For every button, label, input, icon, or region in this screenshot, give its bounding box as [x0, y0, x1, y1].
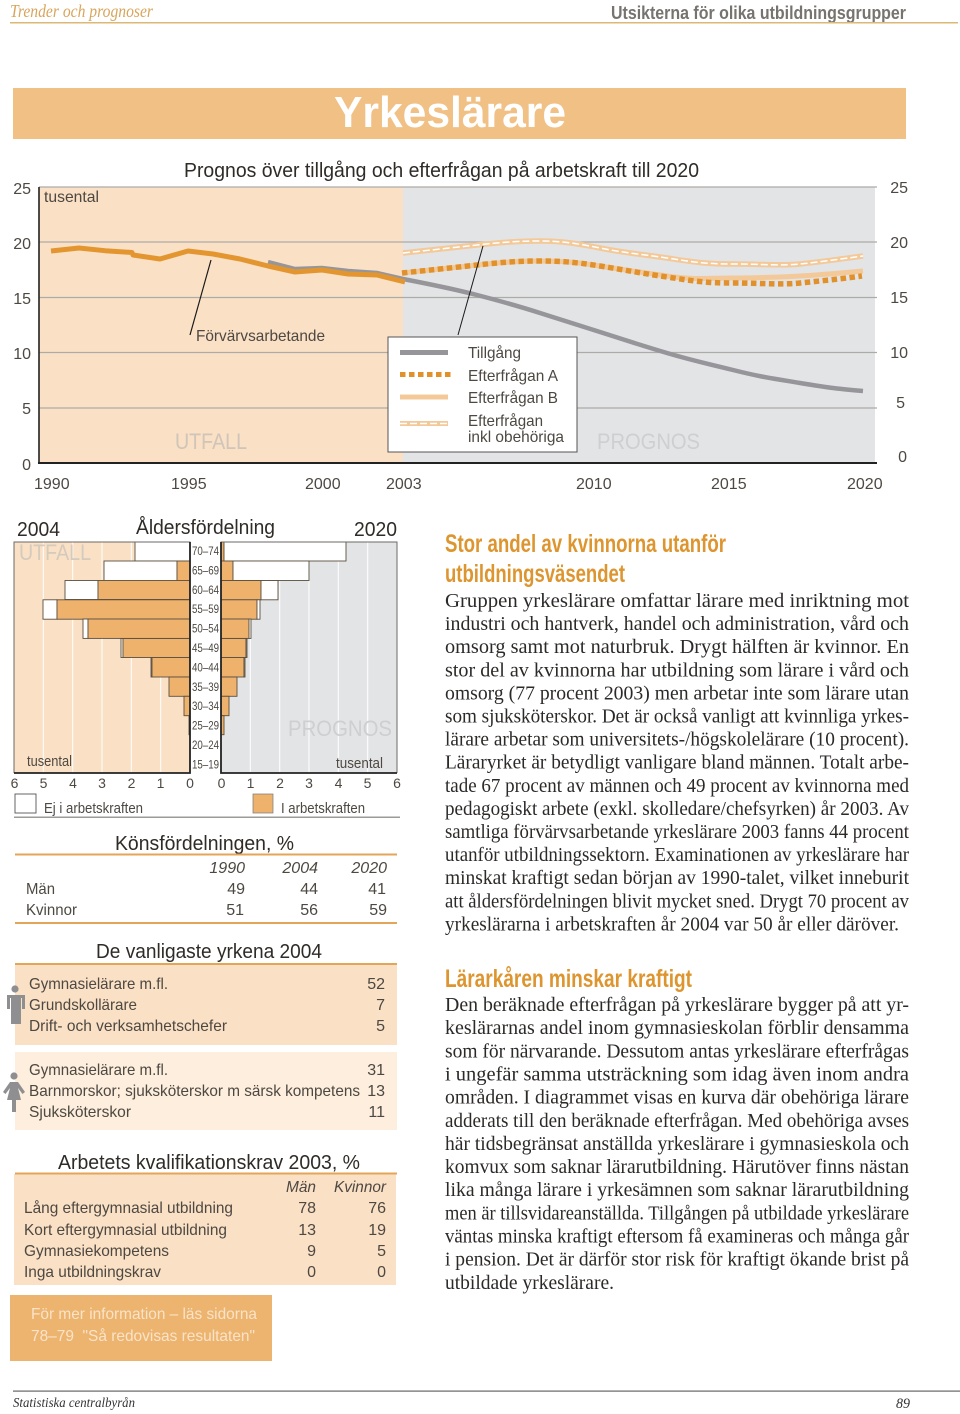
article body 1: Läraryrket är betydligt vanligare bland männen. Totalt arbe-	[445, 752, 909, 774]
demand incl. unqualified line	[403, 241, 863, 265]
pyramid legend: I arbetskraften	[281, 801, 365, 817]
section: most common occupations	[3, 940, 397, 1130]
label: forecast: PROGNOS	[597, 429, 700, 454]
x axis labels: 1990	[34, 476, 70, 493]
y axis labels right: 5	[896, 395, 905, 412]
chart background: outcome	[39, 187, 403, 463]
table: qualification requirements: Män	[286, 1179, 316, 1196]
pyramid x axis labels: 2	[128, 775, 136, 791]
y axis labels right: 0	[898, 449, 907, 466]
age group labels: 30–34	[192, 699, 219, 713]
y axis labels left: 15	[13, 291, 31, 308]
article body 1: stor del av kvinnorna har utbildning som lärare i vård och	[445, 659, 909, 681]
pyramid x axis labels: 6	[393, 775, 401, 791]
y axis labels left: 10	[13, 346, 31, 363]
table: gender distribution: 41	[368, 881, 386, 898]
panel: men occupations: Drift- och verksamhetschefer	[29, 1018, 228, 1035]
pyramid panel: 2004: UTFALL	[19, 540, 91, 565]
article body 2: Den beräknade efterfrågan på yrkeslärare bygger på att yr-	[445, 994, 909, 1016]
table: qualification requirements: 5	[377, 1243, 386, 1260]
table: gender distribution: Könsfördelningen, %	[115, 832, 294, 855]
article body 2: men är tillsvidareanställda. Tillgången på utbildade yrkeslärare	[445, 1202, 909, 1224]
age group labels: 35–39	[192, 680, 219, 694]
article body 1: utanför utbildningssektorn. Examinationen av yrkeslärare har	[445, 844, 909, 866]
table: qualification requirements: 76	[368, 1200, 386, 1217]
pyramid x axis labels: 1	[247, 775, 255, 791]
pyramid headings: 2020	[354, 518, 397, 541]
table: gender distribution: Män	[26, 881, 55, 898]
panel: men occupations: 52	[367, 976, 385, 993]
table: qualification requirements: Arbetets kvalifikationskrav 2003, %	[58, 1151, 360, 1174]
panel: women occupations: 13	[367, 1083, 385, 1100]
article body 2: i ungefär samma utsträckning som idag även inom andra	[445, 1064, 909, 1086]
pyramid panel: 2020: tusental	[336, 756, 383, 772]
page footer: Statistiska centralbyrån	[13, 1396, 135, 1411]
table: qualification requirements: Inga utbildningskrav	[24, 1264, 161, 1281]
pyramid panel: 2020	[221, 542, 397, 773]
article body 2: komvux som saknar lärarutbildning. Härutöver finns nästan	[445, 1156, 909, 1178]
age group labels: 70–74	[192, 544, 219, 558]
table: qualification requirements: Kort eftergymnasial utbildning	[24, 1222, 227, 1239]
article section: women outside education	[445, 530, 910, 935]
age group labels: 65–69	[192, 563, 219, 577]
callout: more information: 78–79 "Så redovisas resultaten"	[31, 1327, 255, 1345]
callout: more information	[10, 1295, 272, 1361]
article body 1: att åldersfördelningen blivit mycket sned. Drygt 70 procent av	[445, 890, 910, 912]
page header: Trender och prognoser	[10, 1, 154, 21]
table: qualification requirements: 9	[307, 1243, 316, 1260]
pyramid x axis labels: 3	[98, 775, 106, 791]
article body 2	[445, 994, 909, 1294]
article heading 2: Lärarkåren minskar kraftigt	[445, 965, 693, 993]
pyramid x axis labels: 5	[364, 775, 372, 791]
age group labels: 55–59	[192, 602, 219, 616]
label: thousands: tusental	[44, 189, 99, 206]
table: qualification requirements: 0	[307, 1264, 316, 1281]
table: gender distribution: Kvinnor	[26, 902, 78, 919]
demand B line	[402, 261, 863, 278]
legend: Efterfrågan A	[468, 367, 558, 385]
article body 1: pedagogiskt arbete (exkl. skolledare/chefsyrken) år 2003. Av	[445, 798, 910, 820]
article body 2: områden. I diagrammet visas en kurva där obehöriga lärare	[445, 1087, 909, 1109]
demand A line	[402, 261, 862, 284]
pyramid legend: Ej i arbetskraften	[44, 801, 143, 817]
x axis labels: 2003	[386, 476, 422, 493]
pyramid x axis labels	[11, 775, 401, 791]
page header	[10, 1, 958, 24]
pyramid x axis labels: 0	[218, 775, 226, 791]
table: qualification requirements: Kvinnor	[334, 1179, 387, 1196]
x axis labels: 2000	[305, 476, 341, 493]
table: qualification requirements: 19	[368, 1222, 386, 1239]
x axis labels: 2010	[576, 476, 612, 493]
article body 1: samtliga förvärvsarbetande yrkeslärare 2003 fanns 44 procent	[445, 821, 909, 843]
age group labels: 45–49	[192, 641, 219, 655]
article body 2: väntas minska kraftigt eftersom få examineras och många går	[445, 1226, 909, 1248]
page footer: 89	[896, 1396, 910, 1412]
table: gender distribution: 44	[300, 881, 318, 898]
pyramid panel: 2004	[14, 540, 190, 773]
legend: Tillgång	[468, 344, 521, 362]
x axis labels: 2020	[847, 476, 883, 493]
panel: women occupations: Barnmorskor; sjuksköterskor m särsk kompetens	[29, 1083, 360, 1100]
article body 2: i pension. Det är därför stor risk för kraftigt ökande brist på	[445, 1249, 909, 1271]
table: qualification requirements: 78	[298, 1200, 316, 1217]
pyramid x axis labels: 4	[335, 775, 343, 791]
age group labels: 60–64	[192, 583, 219, 597]
table: gender distribution: 59	[369, 902, 387, 919]
page header: Utsikterna för olika utbildningsgrupper	[611, 3, 906, 23]
title banner: Yrkeslärare	[334, 88, 566, 137]
icon: woman	[3, 1072, 25, 1112]
legend: inkl obehöriga	[468, 429, 564, 446]
article heading 1: utbildningsväsendet	[445, 560, 625, 588]
panel: women occupations: Gymnasielärare m.fl.	[29, 1062, 168, 1079]
employed line	[51, 248, 405, 282]
table: qualification requirements: Lång eftergymnasial utbildning	[24, 1199, 233, 1217]
article body 1: yrkeslärarna i arbetskraften år 2004 var 50 år eller däröver.	[445, 913, 899, 935]
article body 1: tade 67 procent av männen och 49 procent av kvinnorna med	[445, 775, 909, 797]
article body 1: som sjuksköterskor. Det är också vanligt att kvinnliga yrkes-	[445, 706, 909, 728]
table: qualification requirements: 13	[298, 1222, 316, 1239]
article body 1: lärare arbetar som universitets-/högskolelärare (10 procent).	[445, 729, 909, 751]
pyramid headings: Åldersfördelning	[136, 516, 275, 539]
x axis labels	[34, 476, 883, 493]
y axis labels left: 0	[22, 457, 31, 474]
panel: men occupations: Gymnasielärare m.fl.	[29, 976, 168, 993]
y axis labels right: 20	[890, 235, 908, 252]
article body 2: här tidsbegränsat anställda yrkeslärare i gymnasieskola och	[445, 1133, 909, 1155]
article body 1: minskat kraftigt sedan början av 1990-talet, vilket inneburit	[445, 867, 909, 889]
article body 2: utbildade yrkeslärare.	[445, 1272, 614, 1294]
article body 2: som för närvarande. Dessutom antas yrkeslärare efterfrågas	[445, 1040, 909, 1062]
y axis labels right: 10	[890, 345, 908, 362]
table: gender distribution: 2020	[350, 860, 387, 877]
table: gender distribution	[15, 832, 397, 924]
line chart: supply and demand	[13, 180, 908, 493]
table: gender distribution: 2004	[281, 860, 318, 877]
x axis labels: 2015	[711, 476, 747, 493]
pyramid x axis labels: 0	[186, 775, 194, 791]
article body 2: lika många lärare i yrkesämnen som saknar lärarutbildning	[445, 1179, 909, 1201]
title banner	[13, 88, 906, 139]
age pyramid	[11, 516, 401, 818]
age group labels: 15–19	[192, 757, 219, 771]
table: qualification requirements: 0	[377, 1264, 386, 1281]
callout: more information: För mer information – läs sidorna	[31, 1306, 257, 1323]
panel: women occupations	[15, 1052, 397, 1130]
pyramid x axis labels: 3	[305, 775, 313, 791]
table: qualification requirements: Gymnasiekompetens	[24, 1243, 169, 1260]
article body 1	[445, 590, 910, 935]
section: most common occupations: De vanligaste yrkena 2004	[96, 940, 322, 963]
chart background: forecast	[403, 187, 875, 463]
legend	[388, 337, 577, 452]
article body 1: omsorg (77 procent 2003) men arbetar inte som lärare utan	[445, 682, 909, 704]
article body 1: industri och hantverk, handel och administration, vård och	[445, 613, 909, 635]
x axis labels: 1995	[171, 476, 207, 493]
article heading 1	[445, 530, 726, 588]
page footer	[13, 1390, 960, 1412]
panel: men occupations: 7	[376, 997, 385, 1014]
y axis labels left: 5	[22, 401, 31, 418]
legend: Efterfrågan B	[468, 389, 558, 407]
article body 1: Gruppen yrkeslärare omfattar lärare med inriktning mot	[445, 590, 909, 612]
pyramid x axis labels: 5	[40, 775, 48, 791]
panel: women occupations: 31	[367, 1062, 385, 1079]
panel: men occupations	[15, 965, 397, 1045]
pyramid headings: 2004	[17, 518, 60, 541]
leader line: legend	[458, 246, 483, 335]
table: gender distribution: 1990	[209, 860, 245, 877]
panel: women occupations: 11	[368, 1104, 385, 1121]
icon: man	[7, 985, 25, 1024]
age group labels: 20–24	[192, 738, 219, 752]
pyramid headings	[17, 516, 397, 541]
pyramid x axis labels: 1	[157, 775, 165, 791]
age group labels	[192, 544, 219, 771]
y axis labels left: 25	[13, 181, 31, 198]
article body 2: keslärarnas andel inom gymnasieskolan förblir densamma	[445, 1017, 909, 1039]
y axis labels right: 15	[890, 290, 908, 307]
heading: forecast chart: Prognos över tillgång och efterfrågan på arbetskraft till 2020	[184, 159, 699, 182]
panel: men occupations: 5	[376, 1018, 385, 1035]
age group labels: 40–44	[192, 660, 219, 674]
pyramid x axis labels: 4	[69, 775, 77, 791]
article body 2: adderats till den beräknade efterfrågan. Med obehöriga avses	[445, 1110, 909, 1132]
article heading 1: Stor andel av kvinnorna utanför	[445, 530, 726, 558]
panel: women occupations: Sjuksköterskor	[29, 1104, 132, 1121]
article body 1: omsorg samt mot naturbruk. Drygt hälften är kvinnor. En	[445, 636, 909, 658]
pyramid legend	[14, 794, 400, 818]
label: employed: Förvärvsarbetande	[196, 328, 325, 345]
legend: Efterfrågan	[468, 412, 543, 430]
pyramid x axis labels: 2	[276, 775, 284, 791]
table: qualification requirements	[14, 1151, 397, 1285]
pyramid panel: 2020: PROGNOS	[288, 716, 392, 741]
panel: men occupations: Grundskollärare	[29, 997, 137, 1014]
y axis labels left: 20	[13, 236, 31, 253]
table: gender distribution: 56	[300, 902, 318, 919]
label: outcome: UTFALL	[175, 429, 247, 454]
y axis labels right: 25	[890, 180, 908, 197]
table: gender distribution: 51	[226, 902, 244, 919]
y axis labels right	[890, 180, 908, 466]
table: gender distribution: 49	[227, 881, 245, 898]
age group labels: 25–29	[192, 719, 219, 733]
pyramid x axis labels: 6	[11, 775, 19, 791]
leader line: employed	[190, 260, 211, 335]
age group labels: 50–54	[192, 622, 219, 636]
pyramid panel: 2004: tusental	[27, 754, 72, 770]
supply line	[268, 262, 863, 391]
article section: teaching staff shrinking	[445, 965, 909, 1294]
y axis labels left	[13, 181, 31, 474]
